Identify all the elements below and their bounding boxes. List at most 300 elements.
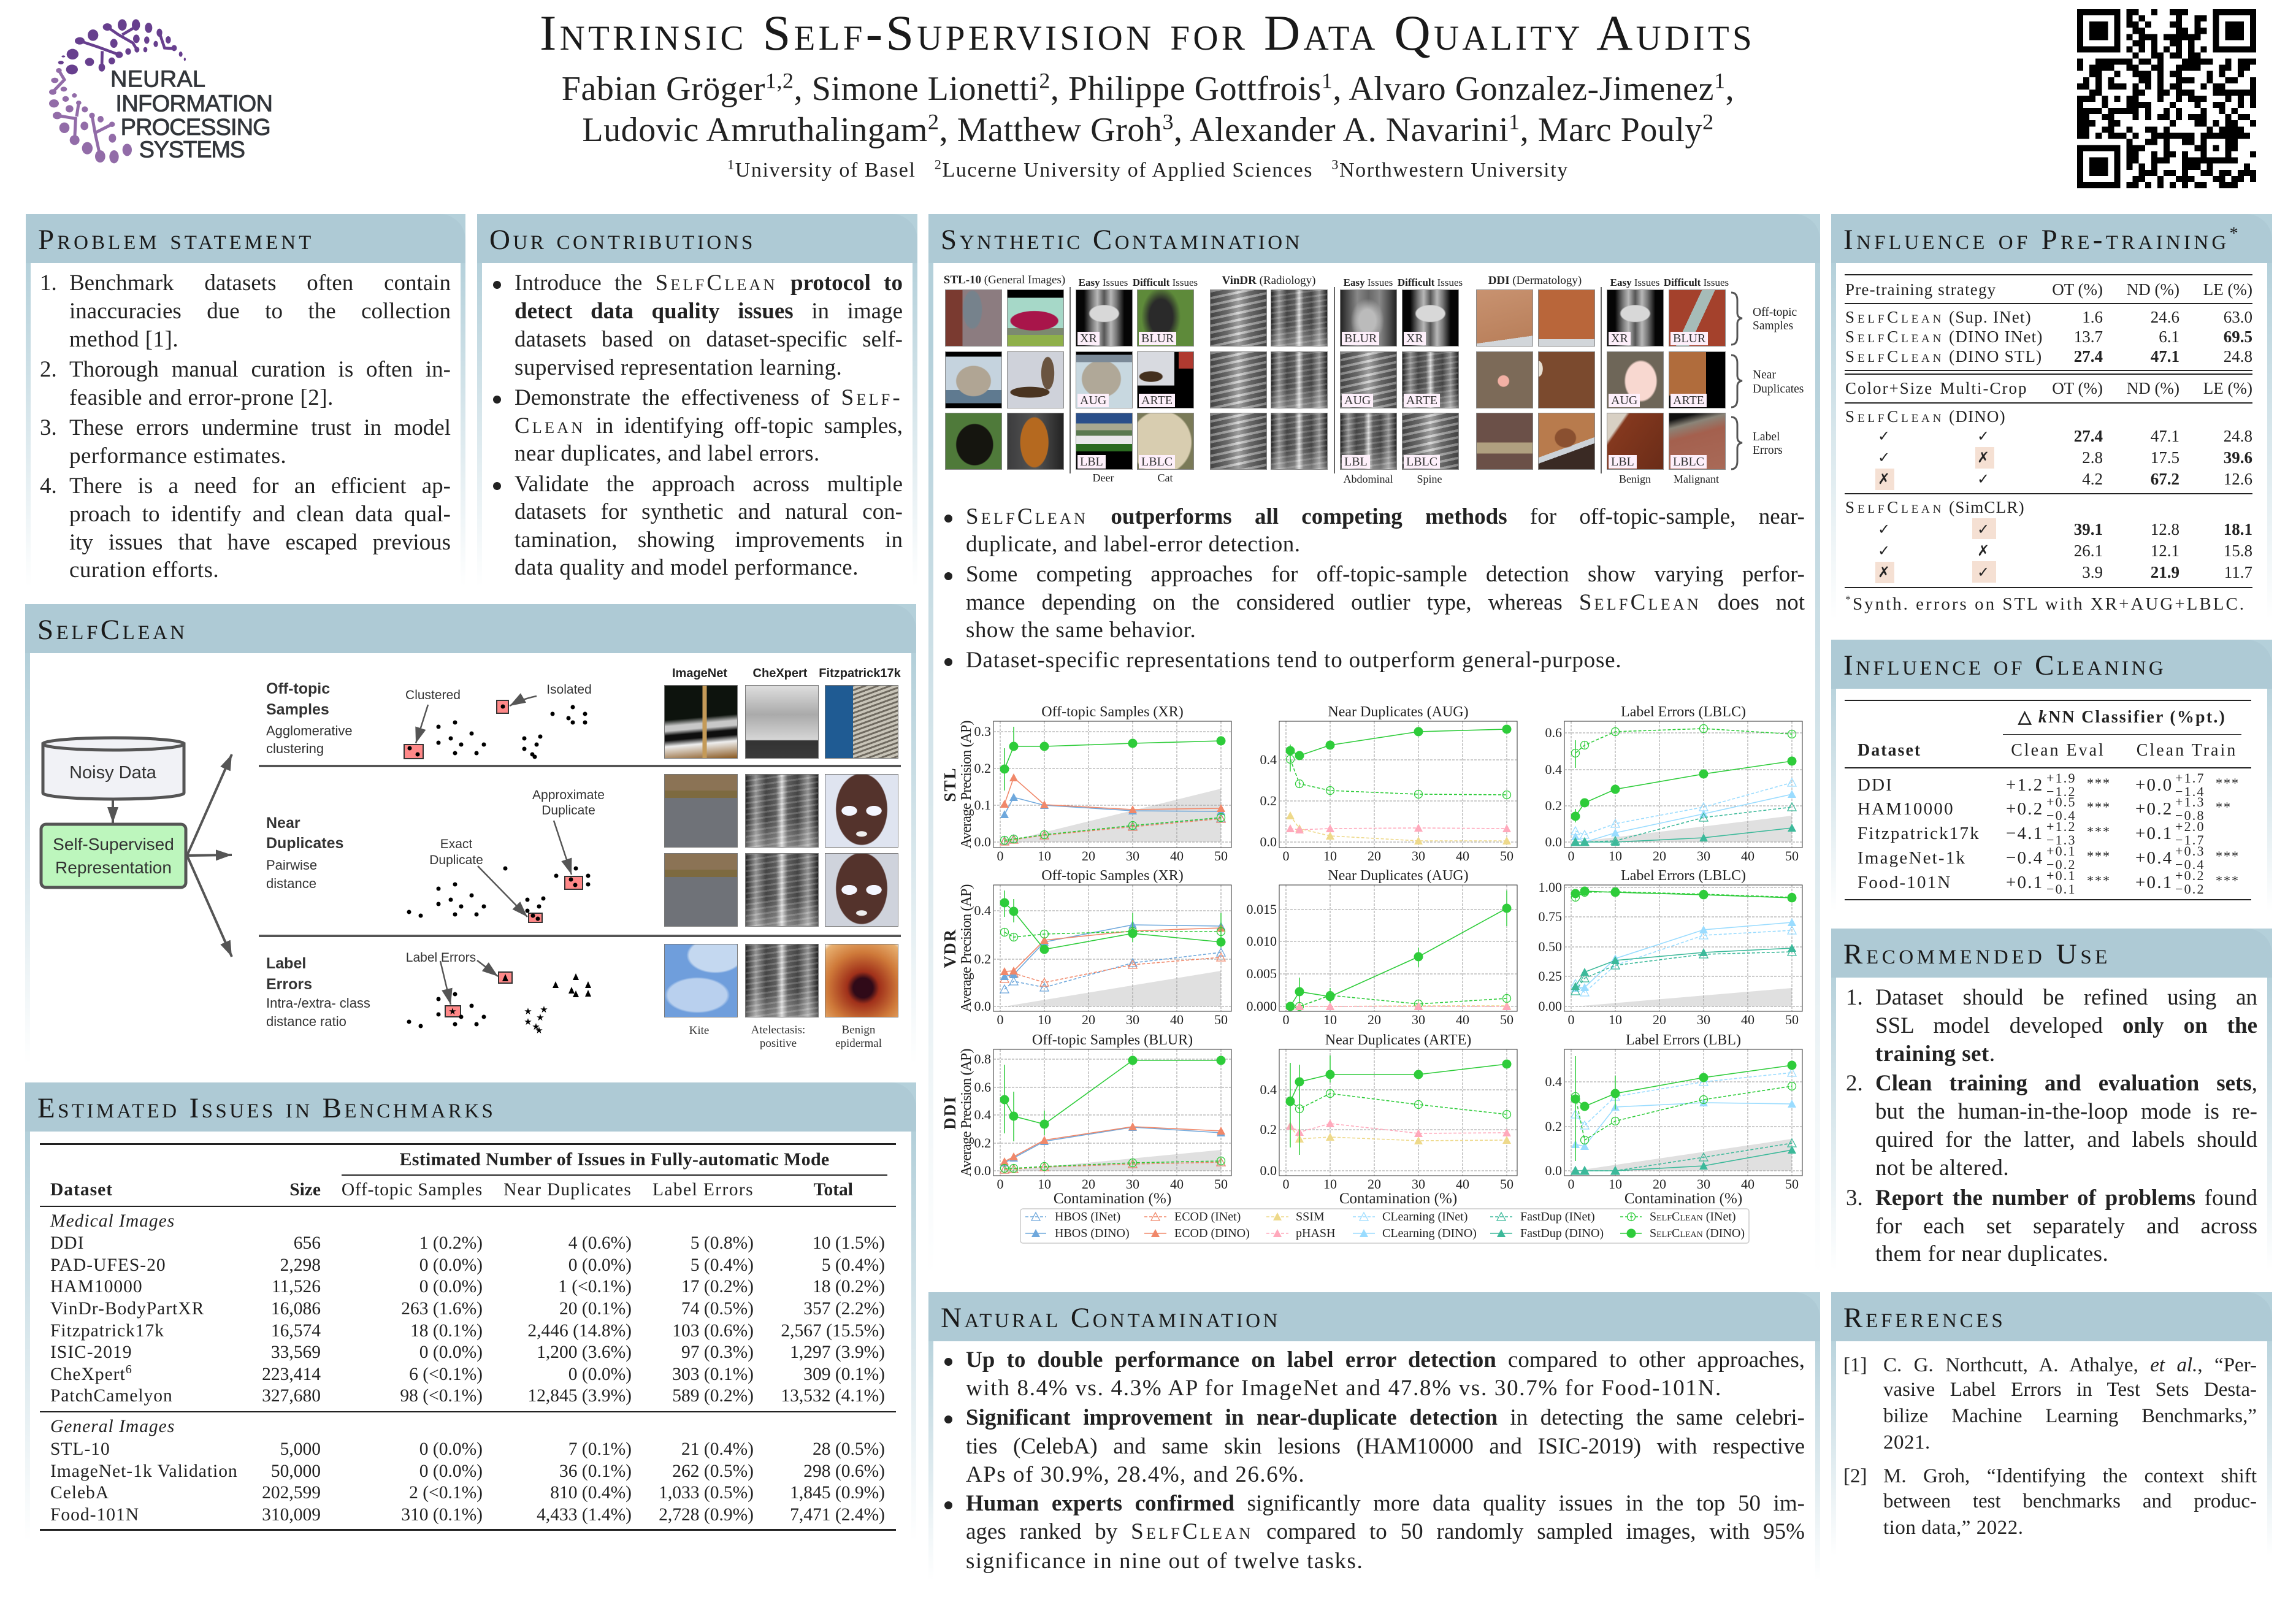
chart: STL off-topic samples XR: 10 (1038, 848, 1051, 864)
heading: references: References (1843, 1302, 2006, 1334)
table: pre-training strategy comparison: 18.1 (2224, 520, 2252, 538)
figure captions: Deer (1093, 472, 1114, 484)
chart: VDR near duplicates AUG: 20 (1368, 1012, 1381, 1027)
table: pre-training strategy comparison: 6.1 (2159, 327, 2179, 346)
legend: methods: CLearning (INet) (1382, 1210, 1468, 1224)
chart: STL off-topic samples XR: 50 (1214, 848, 1228, 864)
chart: STL near duplicates AUG: 0.4 (1260, 752, 1277, 767)
figure headers: Difficult Issues (1664, 277, 1729, 288)
table: estimated number of issues: 263 (1.6%) (401, 1299, 483, 1319)
table: estimated number of issues: 810 (0.4%) (550, 1483, 632, 1503)
numbered list: recommended use: but the human-in-the-loop mode is re- (1875, 1099, 2257, 1124)
table: estimated number of issues: 327,680 (262, 1386, 321, 1406)
image tiles: STL-10: AUG (1080, 394, 1106, 407)
table: estimated number of issues: 5 (0.8%) (691, 1233, 754, 1252)
figure captions: Spine (1417, 473, 1442, 485)
table: estimated number of issues: 98 (<0.1%) (400, 1386, 483, 1406)
numbered list: problem statement: ity issues that have escaped previous (69, 530, 451, 555)
table: estimated number of issues: 20 (0.1%) (559, 1299, 632, 1319)
table: pre-training strategy comparison: 15.8 (2224, 542, 2252, 560)
numbered list: problem statement: 4. (40, 473, 57, 499)
panel: synthetic contamination (928, 214, 1820, 1275)
chart: DDI off-topic samples BLUR: 0.4 (974, 1107, 991, 1122)
bullet list: our contributions (493, 270, 903, 580)
bullet list: our contributions: near duplicates, and label errors. (515, 441, 820, 466)
table: estimated number of issues (40, 1143, 896, 1531)
heading: synthetic contamination: Synthetic Contamination (941, 224, 1303, 256)
scatter: label errors: Label Errors (406, 951, 476, 965)
chart: VDR near duplicates AUG (1246, 868, 1517, 1027)
figure headers: Difficult Issues (1133, 277, 1198, 288)
panel: references (1831, 1292, 2272, 1556)
icon: noisy data cylinder: Noisy Data (69, 763, 157, 783)
y axis labels: average precision (959, 720, 974, 1176)
table: kNN classifier change: *** (2087, 775, 2111, 791)
chart: STL off-topic samples XR: 0.1 (974, 797, 991, 813)
near duplicates label: Near (266, 814, 300, 832)
bullet list: natural contamination findings: ages ranked by SelfClean compared to 50 randomly sampled images, with 95% (966, 1519, 1805, 1544)
table: estimated number of issues: 103 (0.6%) (672, 1321, 754, 1341)
table: kNN classifier change: Clean Eval (2011, 741, 2105, 760)
authors: Fabian Gröger1,2, Simone Lionetti2, Philippe Gottfrois1, Alvaro Gonzalez-Jimenez1, (562, 68, 1734, 108)
near duplicates label: Duplicates (266, 835, 343, 852)
chart: STL off-topic samples XR: Off-topic Samples (XR) (1041, 704, 1184, 720)
scatter: label errors: ★ (536, 1012, 545, 1023)
braces with issue type labels (1726, 285, 1815, 475)
figure headers: Difficult Issues (1398, 277, 1463, 288)
off-topic samples label: clustering (266, 741, 324, 756)
scatter: near duplicates: Exact (440, 837, 472, 851)
table: kNN classifier change: +0.1 (2006, 873, 2043, 892)
image column headers: CheXpert (753, 667, 808, 680)
image tiles: DDI: XR (1611, 332, 1628, 345)
chart: STL label errors LBLC: 0.0 (1545, 834, 1562, 849)
table: estimated number of issues: 0 (0.0%) (568, 1364, 632, 1384)
image captions: Kite (689, 1024, 709, 1037)
chart: DDI near duplicates ARTE: Contamination (%) (1339, 1190, 1457, 1207)
chart: DDI near duplicates ARTE: 0.0 (1260, 1163, 1277, 1178)
chart: DDI label errors LBL: Label Errors (LBL) (1626, 1032, 1741, 1048)
table: estimated number of issues: Label Errors (652, 1180, 754, 1200)
chart: VDR label errors LBLC: Label Errors (LBLC) (1621, 868, 1746, 884)
table: estimated number of issues: 50,000 (271, 1461, 321, 1480)
chart: STL off-topic samples XR: 30 (1126, 848, 1139, 864)
reference list: vasive Label Errors in Test Sets Desta- (1883, 1379, 2257, 1401)
chart: VDR off-topic samples XR: 50 (1214, 1012, 1228, 1027)
table: estimated number of issues: 13,532 (4.1%) (781, 1386, 885, 1406)
bullet list: natural contamination findings: ties (CelebA) and same skin lesions (HAM10000 and ISIC-2019) with respective (966, 1434, 1805, 1459)
chart: DDI off-topic samples BLUR: 0 (997, 1176, 1003, 1192)
chart: DDI off-topic samples BLUR: 40 (1170, 1176, 1184, 1192)
table: kNN classifier change: −0.4 (2006, 848, 2043, 868)
table: pre-training strategy comparison: 27.4 (2074, 427, 2103, 445)
table: pre-training strategy comparison: 24.8 (2224, 347, 2252, 366)
bullet list: synthetic findings: mance depending on the considered outlier type, whereas SelfClean does not (966, 590, 1805, 615)
legend: methods: SelfClean (INet) (1650, 1210, 1736, 1224)
chart: VDR label errors LBLC: 0.75 (1538, 909, 1562, 924)
QR code (2077, 9, 2256, 188)
table: pre-training strategy comparison: Pre-training strategy (1845, 280, 1996, 299)
table: estimated number of issues: 357 (2.2%) (803, 1299, 885, 1319)
chart: DDI label errors LBL: 30 (1697, 1176, 1710, 1192)
chart: DDI off-topic samples BLUR (974, 1032, 1231, 1207)
chart: VDR near duplicates AUG: Near Duplicates (AUG) (1328, 868, 1469, 884)
chart: DDI near duplicates ARTE: 0.4 (1260, 1082, 1277, 1097)
chart: STL label errors LBLC: 40 (1741, 848, 1755, 864)
chart: DDI label errors LBL: 50 (1785, 1176, 1799, 1192)
heading: estimated issues (25, 1082, 916, 1132)
chart: DDI label errors LBL: 20 (1653, 1176, 1666, 1192)
arrow: data to representation (112, 800, 114, 823)
table: estimated number of issues: 21 (0.4%) (681, 1439, 754, 1458)
scatter: near duplicates: Approximate (532, 788, 605, 802)
table: estimated number of issues: 2,446 (14.8%) (527, 1321, 632, 1341)
table: estimated number of issues: 5 (0.4%) (691, 1255, 754, 1274)
table: kNN classifier change: *** (2087, 799, 2111, 814)
scatter: label errors: ★ (524, 1016, 532, 1027)
table: estimated number of issues: 0 (0.0%) (419, 1439, 483, 1458)
title: Intrinsic Self-Supervision for Data Quality Audits (540, 5, 1755, 61)
chart: VDR near duplicates AUG: 50 (1500, 1012, 1513, 1027)
table: estimated number of issues: 1 (<0.1%) (558, 1277, 632, 1297)
table: kNN classifier change: +0.0 (2135, 775, 2173, 795)
image column headers: Fitzpatrick17k (819, 667, 901, 680)
table: kNN classifier change: HAM10000 (1858, 799, 1954, 819)
table: estimated number of issues: 2 (<0.1%) (409, 1483, 483, 1503)
table: pre-training strategy comparison: 47.1 (2151, 347, 2179, 366)
chart: DDI near duplicates ARTE: 40 (1456, 1176, 1469, 1192)
table: estimated number of issues: 0 (0.0%) (419, 1461, 483, 1480)
chart: DDI off-topic samples BLUR: Off-topic Samples (BLUR) (1032, 1032, 1193, 1048)
numbered list: problem statement: curation efforts. (69, 557, 219, 583)
box: self-supervised representation: Representation (55, 858, 172, 877)
table: pre-training strategy comparison: ✓ (1977, 470, 1991, 488)
heading: problem statement (26, 214, 465, 263)
bullet list: synthetic findings (944, 503, 1805, 675)
image tiles: VinDR: BLUR (1344, 332, 1377, 345)
chart: DDI off-topic samples BLUR: Contamination (%) (1054, 1190, 1171, 1207)
image captions: positive (760, 1037, 797, 1050)
numbered list: recommended use: 1. (1846, 985, 1863, 1010)
heading: estimated issues: Estimated Issues in Benchmarks (37, 1092, 496, 1124)
numbered list: recommended use: not be altered. (1875, 1155, 2009, 1181)
image examples grid (664, 685, 898, 1017)
numbered list: recommended use: 3. (1846, 1185, 1863, 1211)
image tiles: STL-10: LBL (1080, 455, 1103, 469)
panel: recommended use (1831, 929, 2272, 1270)
numbered list: problem statement: Thorough manual curation is often in- (69, 357, 451, 382)
table: estimated number of issues: Estimated Number of Issues in Fully-automatic Mode (399, 1149, 830, 1170)
chart: VDR label errors LBLC: 0 (1567, 1012, 1575, 1027)
logo: Neural Information Processing Systems: NEURAL (110, 67, 205, 93)
table: pre-training strategy comparison: 12.1 (2151, 542, 2179, 560)
chart grid: average precision vs contamination (938, 693, 1815, 1251)
table: estimated number of issues: 310 (0.1%) (401, 1505, 483, 1525)
legend: methods: CLearning (DINO) (1382, 1227, 1477, 1240)
logo: Neural Information Processing Systems (49, 19, 273, 163)
table: pre-training strategy comparison: 3.9 (2082, 563, 2103, 581)
table: estimated number of issues: ImageNet-1k Validation (50, 1461, 238, 1480)
table: estimated number of issues: 5 (0.4%) (822, 1255, 885, 1274)
table: pre-training strategy comparison: 24.6 (2151, 308, 2179, 326)
table: pre-training strategy comparison: 69.5 (2224, 327, 2252, 346)
legend: methods: ECOD (INet) (1174, 1210, 1241, 1224)
table: estimated number of issues: 17 (0.2%) (681, 1277, 754, 1297)
heading: SelfClean: SelfClean (37, 614, 188, 646)
braces with issue type labels: Duplicates (1753, 383, 1804, 396)
figure captions: Cat (1158, 472, 1173, 484)
table: pre-training strategy comparison: 2.8 (2082, 448, 2103, 467)
table: kNN classifier change: −1.3 (2046, 832, 2076, 848)
table: pre-training strategy comparison: 21.9 (2151, 563, 2179, 581)
reference list (1843, 1352, 2257, 1542)
numbered list: problem statement: There is a need for an efficient ap- (69, 473, 451, 499)
bullet list: natural contamination findings (944, 1346, 1805, 1576)
table: kNN classifier change: −0.4 (2046, 808, 2076, 823)
bullet list: our contributions: Validate the approach across multiple (515, 472, 903, 497)
table: kNN classifier change (1845, 700, 2251, 901)
image tiles: VinDR: ARTE (1406, 394, 1437, 407)
label errors label: Errors (266, 976, 312, 993)
chart: DDI label errors LBL: 0.4 (1545, 1074, 1562, 1089)
label errors label: distance ratio (266, 1014, 346, 1029)
table: kNN classifier change: −4.1 (2006, 824, 2043, 843)
bullet list: synthetic findings: Some competing approaches for off-topic-sample detection show varying perfor- (966, 562, 1805, 587)
scatter: near duplicates (407, 788, 605, 922)
chart: VDR label errors LBLC: 1.00 (1538, 879, 1562, 895)
legend: methods: FastDup (INet) (1520, 1210, 1595, 1224)
table: estimated number of issues: 0 (0.0%) (419, 1342, 483, 1362)
image tiles: STL-10: XR (1080, 332, 1097, 345)
scatter: off-topic samples (404, 683, 592, 759)
numbered list: problem statement: inaccuracies due to the collection (69, 299, 451, 324)
table: estimated number of issues: 0 (0.0%) (419, 1277, 483, 1297)
table: estimated number of issues: Fitzpatrick17k (50, 1321, 164, 1341)
chart: STL off-topic samples XR (974, 704, 1231, 864)
chart: DDI near duplicates ARTE: 10 (1323, 1176, 1337, 1192)
chart: DDI off-topic samples BLUR: 50 (1214, 1176, 1228, 1192)
heading: natural contamination: Natural Contamination (941, 1302, 1280, 1334)
table: estimated number of issues: 16,086 (271, 1299, 321, 1319)
logo: Neural Information Processing Systems: PROCESSING (121, 115, 271, 140)
numbered list: problem statement: These errors undermine trust in model (69, 415, 451, 440)
bullet list: our contributions: tamination, showing improvements in (515, 527, 903, 553)
table: kNN classifier change: +0.3 (2175, 843, 2205, 859)
table: pre-training strategy comparison: ND (%) (2127, 280, 2179, 299)
table: estimated number of issues: 202,599 (262, 1483, 321, 1503)
bullet list: our contributions: detect data quality issues in image (515, 299, 903, 324)
footnote: *Synth. errors on STL with XR+AUG+LBLC. (1845, 593, 2246, 614)
table: pre-training strategy comparison: Color+Size (1845, 379, 1933, 397)
scatter: off-topic samples: Isolated (546, 683, 592, 697)
logo: Neural Information Processing Systems: INFORMATION (115, 91, 273, 117)
table: estimated number of issues: General Images (50, 1417, 175, 1436)
table: pre-training strategy comparison: 13.7 (2074, 327, 2103, 346)
chart: VDR off-topic samples XR: 0.0 (974, 998, 991, 1014)
chart: DDI near duplicates ARTE: 0.2 (1260, 1122, 1277, 1137)
table: pre-training strategy comparison: Multi-Crop (1940, 379, 2027, 397)
image tiles: STL-10: ARTE (1141, 394, 1173, 407)
legend: methods: ECOD (DINO) (1174, 1227, 1250, 1240)
table: estimated number of issues: 309 (0.1%) (803, 1364, 885, 1384)
chart: DDI label errors LBL: 10 (1609, 1176, 1622, 1192)
table: kNN classifier change: ImageNet-1k (1858, 848, 1966, 868)
table: kNN classifier change: ** (2216, 799, 2232, 814)
figure: synthetic contamination examples (944, 274, 1804, 485)
numbered list: problem statement: 3. (40, 415, 57, 440)
chart: VDR off-topic samples XR: 0.2 (974, 951, 991, 967)
image tiles: DDI: LBLC (1673, 455, 1704, 469)
table: pre-training strategy comparison: SelfClean (Sup. INet) (1845, 308, 2032, 326)
row labels: STL, VDR, DDI: STL (941, 767, 959, 802)
legend: methods (1020, 1209, 1749, 1243)
bullet list: our contributions: Introduce the SelfClean protocol to (515, 270, 903, 296)
image tiles: VinDR: AUG (1344, 394, 1371, 407)
table: kNN classifier change: +0.2 (2175, 868, 2205, 883)
table: pre-training strategy comparison: ✓ (1878, 542, 1891, 559)
table: pre-training strategy comparison: 17.5 (2151, 448, 2179, 467)
table: kNN classifier change: +1.7 (2175, 770, 2205, 786)
table: pre-training strategy comparison: 47.1 (2151, 427, 2179, 445)
table: kNN classifier change: *** (2216, 848, 2240, 864)
image column headers: ImageNet (672, 667, 727, 680)
table: pre-training strategy comparison: 12.6 (2224, 470, 2252, 488)
panel: SelfClean method overview (25, 604, 916, 1064)
chart: STL label errors LBLC: 0 (1567, 848, 1575, 864)
table: kNN classifier change: Food-101N (1858, 873, 1952, 892)
chart: VDR near duplicates AUG: 30 (1412, 1012, 1425, 1027)
chart: STL off-topic samples XR: 0.3 (974, 724, 991, 739)
off-topic samples label (266, 680, 353, 756)
table: estimated number of issues: 18 (0.1%) (410, 1321, 483, 1341)
numbered list: problem statement: Benchmark datasets often contain (69, 270, 451, 296)
image tiles: VinDR (1210, 289, 1459, 470)
image tiles: VinDR: XR (1406, 332, 1423, 345)
logo: Neural Information Processing Systems: SYSTEMS (139, 137, 245, 163)
legend: methods: pHASH (1296, 1227, 1335, 1240)
chart: STL near duplicates AUG: 40 (1456, 848, 1469, 864)
table: kNN classifier change: Clean Train (2137, 741, 2237, 760)
bullet list: our contributions: Clean in identifying off-topic samples, (515, 413, 903, 439)
off-topic samples label: Off-topic (266, 680, 330, 697)
table: pre-training strategy comparison: ✓ (1878, 521, 1891, 538)
table: pre-training strategy comparison: SelfClean (DINO INet) (1845, 327, 2043, 346)
table: pre-training strategy comparison: 11.7 (2224, 563, 2252, 581)
table: kNN classifier change: +0.1 (2135, 824, 2173, 843)
heading: recommended use (1831, 929, 2272, 978)
table: kNN classifier change: DDI (1858, 775, 1893, 795)
chart: STL label errors LBLC: 20 (1653, 848, 1666, 864)
heading: references (1831, 1292, 2272, 1341)
table: pre-training strategy comparison (1845, 274, 2252, 615)
bullet list: natural contamination findings: with 8.4% vs. 4.3% AP for ImageNet and 47.8% vs. 30.7% for Food-101N. (966, 1376, 1722, 1401)
table: pre-training strategy comparison: 26.1 (2074, 542, 2103, 560)
figure headers: VinDR (Radiology) (1222, 274, 1315, 287)
bullet list: natural contamination findings: significance in nine out of twelve tasks. (966, 1549, 1363, 1574)
arrows: representation to issue types (187, 754, 232, 957)
heading: SelfClean (25, 604, 916, 653)
image captions: epidermal (835, 1037, 882, 1050)
authors (562, 68, 1734, 149)
reference list: between test benchmarks and produc- (1883, 1490, 2257, 1512)
chart: STL near duplicates AUG: 20 (1368, 848, 1381, 864)
chart: STL near duplicates AUG: 30 (1412, 848, 1425, 864)
table: estimated number of issues: CelebA (50, 1483, 109, 1503)
table: estimated number of issues: DDI (50, 1233, 84, 1252)
chart: DDI off-topic samples BLUR: 0.0 (974, 1163, 991, 1178)
chart: DDI off-topic samples BLUR: 0.2 (974, 1135, 991, 1151)
table: estimated number of issues: CheXpert6 (50, 1363, 132, 1384)
heading: influence of cleaning: Influence of Cleaning (1843, 649, 2166, 681)
table: estimated number of issues: HAM10000 (50, 1277, 143, 1297)
chart: VDR label errors LBLC: 0.50 (1538, 939, 1562, 954)
reference list: M. Groh, “Identifying the context shift (1883, 1465, 2257, 1487)
table: estimated number of issues: 11,526 (272, 1277, 321, 1297)
chart: VDR near duplicates AUG: 0.010 (1246, 933, 1277, 949)
figure captions: Benign (1619, 473, 1651, 485)
table: kNN classifier change: *** (2087, 873, 2111, 888)
chart: STL label errors LBLC: Label Errors (LBLC) (1621, 704, 1746, 720)
chart: VDR off-topic samples XR: Off-topic Samples (XR) (1041, 868, 1184, 884)
table: pre-training strategy comparison: 39.6 (2224, 448, 2252, 467)
braces with issue type labels: Off-topic (1753, 306, 1797, 319)
reference list: C. G. Northcutt, A. Athalye, et al., “Per- (1883, 1354, 2257, 1376)
figure headers: Easy Issues (1079, 277, 1128, 288)
figure headers (944, 274, 1729, 288)
image tiles: STL-10: BLUR (1141, 332, 1174, 345)
chart: STL near duplicates AUG: Near Duplicates (AUG) (1328, 704, 1469, 720)
chart: VDR off-topic samples XR: 40 (1170, 1012, 1184, 1027)
table: kNN classifier change: +0.5 (2046, 794, 2076, 810)
chart: STL off-topic samples XR: 20 (1082, 848, 1095, 864)
table: pre-training strategy comparison: ✓ (1977, 427, 1991, 445)
table: estimated number of issues: 4 (0.6%) (568, 1233, 632, 1252)
chart: VDR label errors LBLC: 50 (1785, 1012, 1799, 1027)
row labels: STL, VDR, DDI (941, 767, 959, 1130)
chart: DDI near duplicates ARTE: Near Duplicates (ARTE) (1325, 1032, 1471, 1048)
image column headers (672, 667, 901, 680)
numbered list: recommended use: them for near duplicates. (1875, 1241, 2108, 1266)
scatter: near duplicates: Duplicate (429, 853, 483, 867)
table: pre-training strategy comparison: LE (%) (2203, 280, 2252, 299)
table: pre-training strategy comparison: ✗ (1878, 564, 1891, 581)
numbered list: recommended use: 2. (1846, 1071, 1863, 1096)
heading: our contributions (477, 214, 917, 263)
flow diagram: noisy data to issue types (39, 667, 901, 1050)
numbered list: recommended use (1846, 984, 2257, 1268)
label errors label (266, 955, 370, 1029)
table: pre-training strategy comparison: 27.4 (2074, 347, 2103, 366)
table: kNN classifier change: +1.2 (2006, 775, 2043, 795)
bullet list: synthetic findings: Dataset-specific representations tend to outperform general-purpose. (966, 648, 1621, 673)
chart: STL label errors LBLC: 30 (1697, 848, 1710, 864)
row labels: STL, VDR, DDI: DDI (941, 1095, 959, 1130)
table: kNN classifier change: −0.2 (2046, 857, 2076, 872)
chart: VDR off-topic samples XR: 20 (1082, 1012, 1095, 1027)
table: pre-training strategy comparison: OT (%) (2052, 280, 2103, 299)
table: estimated number of issues: 97 (0.3%) (681, 1342, 754, 1362)
table: estimated number of issues: 589 (0.2%) (672, 1386, 754, 1406)
chart: STL off-topic samples XR: 0.0 (974, 834, 991, 849)
table: estimated number of issues: 2,567 (15.5%) (781, 1321, 885, 1341)
legend: methods: SelfClean (DINO) (1650, 1227, 1745, 1240)
chart: DDI near duplicates ARTE: 0 (1283, 1176, 1289, 1192)
table: estimated number of issues: Food-101N (50, 1505, 139, 1525)
reference list: bilize Machine Learning Benchmarks,” (1883, 1405, 2257, 1427)
numbered list: recommended use: quired for the latter, and labels should (1875, 1127, 2257, 1152)
chart: STL near duplicates AUG: 0.0 (1260, 834, 1277, 849)
chart: STL near duplicates AUG (1260, 704, 1517, 864)
